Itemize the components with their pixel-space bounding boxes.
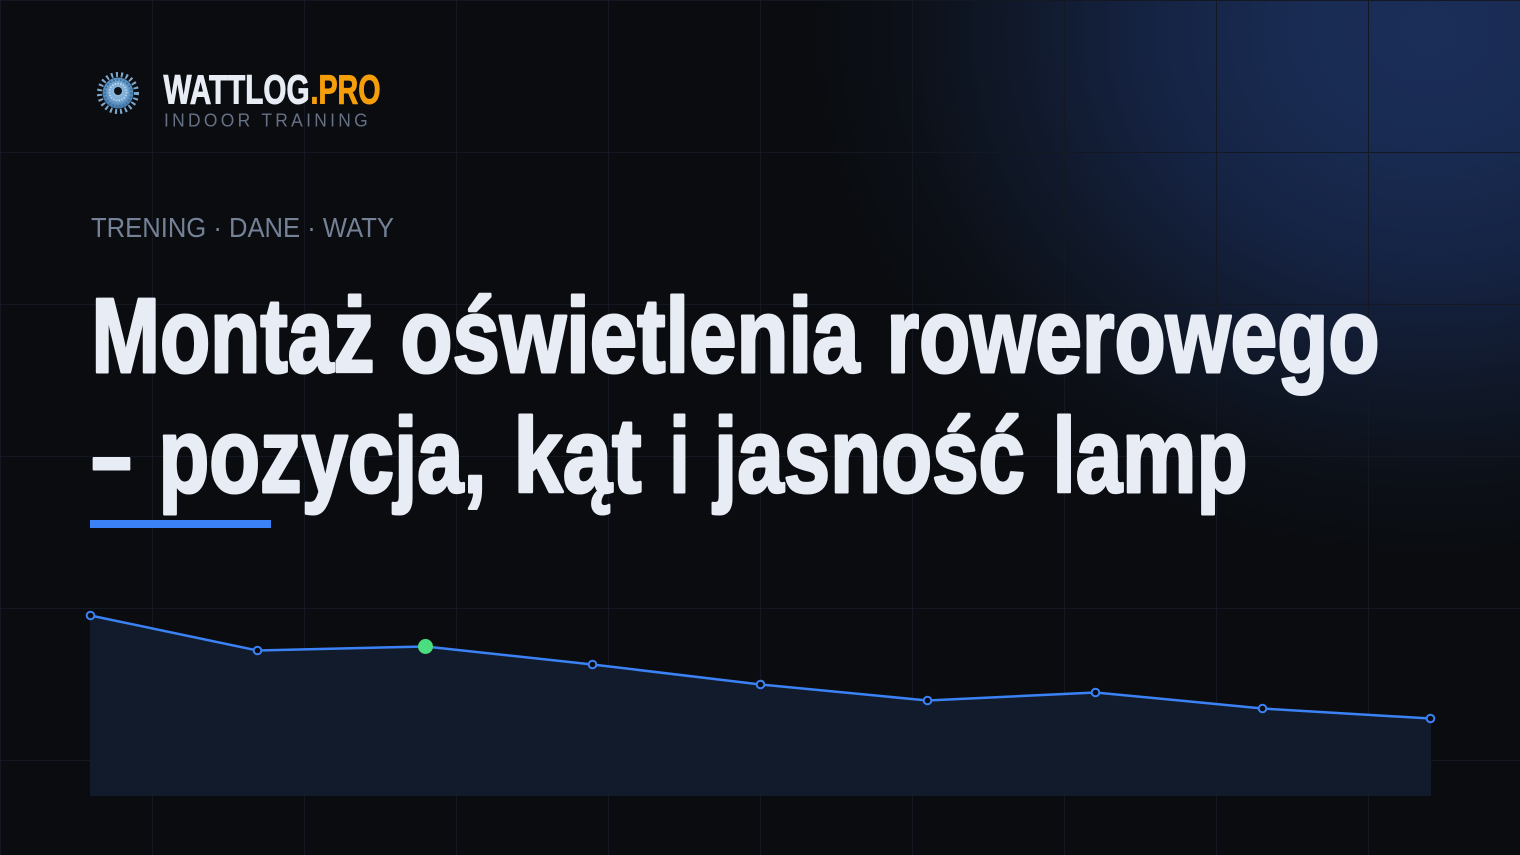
- title line 1: [92, 277, 1380, 395]
- title underline: [90, 520, 271, 528]
- logo tagline: INDOOR TRAINING: [164, 110, 371, 130]
- title: [92, 277, 1380, 515]
- icon: cassette gear: [100, 74, 136, 112]
- line chart: [87, 612, 1434, 796]
- logo wordmark: .PRO: [310, 66, 380, 112]
- chart area: [90, 616, 1431, 796]
- title line 1: oświetlenia: [400, 277, 860, 395]
- title line 2: lamp: [1052, 397, 1248, 515]
- logo wordmark: WATTLOG: [164, 66, 310, 112]
- title line 2: i: [670, 397, 690, 515]
- title line 2: kąt: [514, 397, 642, 515]
- title line 2: jasność: [712, 397, 1025, 515]
- chart points: [87, 612, 1434, 722]
- chart line: [90, 616, 1430, 718]
- logo: [100, 66, 380, 130]
- title line 1: Montaż: [92, 277, 374, 395]
- title line 2: [92, 397, 1248, 515]
- title line 2: –: [92, 397, 132, 515]
- eyebrow: TRENING · DANE · WATY: [91, 212, 394, 243]
- highlighted point: [418, 639, 433, 654]
- title line 2: pozycja,: [158, 397, 486, 515]
- title line 1: rowerowego: [886, 277, 1380, 395]
